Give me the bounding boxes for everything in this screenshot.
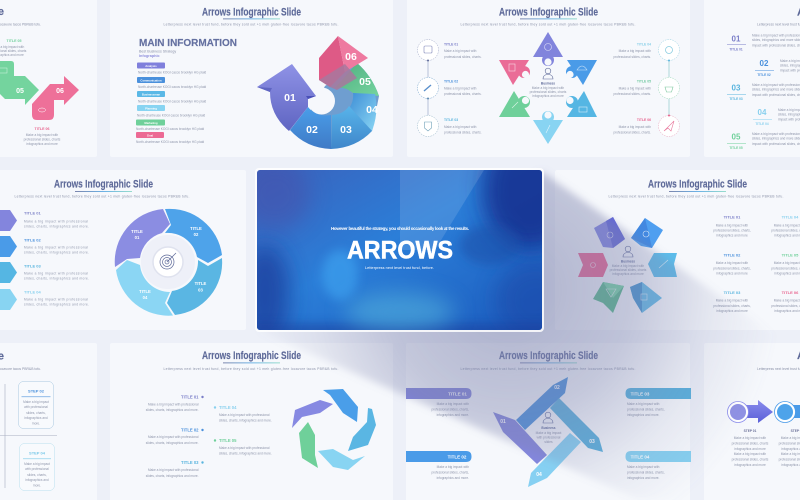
panel: main information with 3D arrow — [110, 0, 393, 157]
step 01 text: STEP 01 — [744, 429, 757, 433]
green arrow 05: 05 — [16, 88, 24, 95]
title 05 block — [0, 39, 27, 57]
segment 01 — [115, 209, 170, 267]
step 04 card: with professional — [25, 467, 49, 471]
donut chart of arrows: 02 — [194, 232, 199, 237]
segment 03 — [331, 106, 372, 149]
donut chart of arrows: TITLE — [195, 281, 207, 286]
subtitle: Letterpress next level trust fund, before they sold out +1 meh gluten-free locavore tacos PBR&B tofu. — [460, 22, 636, 26]
pinwheel arrows: 04 — [536, 472, 542, 478]
step 01 arrow — [728, 400, 773, 423]
step 01 text: infographics and more — [734, 447, 766, 451]
titled list: slides, charts, infographics and more. — [24, 302, 89, 306]
center business text: infographics and more — [612, 272, 644, 276]
left timeline — [418, 40, 482, 136]
strategy subheading: Best Business Strategy — [139, 50, 176, 54]
step 03 — [727, 83, 800, 101]
center business text — [610, 260, 647, 276]
text column one: professional slides, charts, — [713, 266, 751, 270]
list of six labelled bars: Businessman — [142, 92, 160, 96]
arrow: teal — [348, 408, 376, 451]
arrow: purple — [594, 217, 625, 248]
step 04 card: infographics and — [25, 478, 49, 482]
arrow: teal — [648, 253, 677, 277]
step 04 card: STEP 04 — [29, 450, 46, 456]
step 02 text — [779, 429, 800, 467]
arrow 03 — [550, 398, 603, 452]
pinwheel arrows: 02 — [554, 385, 560, 391]
text column one: infographics and more — [716, 309, 748, 313]
3D circular arrow chart: 06 — [345, 51, 357, 63]
3D circular arrow chart: 05 — [359, 76, 371, 88]
long cast shadow of the center slide — [257, 172, 800, 500]
title tab 03: professional slides, charts, — [627, 408, 665, 412]
center business text: professional slides, charts — [610, 268, 647, 272]
step 02: 02 — [760, 59, 769, 68]
text column one: Make a big impact with — [716, 224, 748, 228]
strategy subheading — [139, 50, 176, 58]
step 04 card: Make a big impact — [24, 462, 50, 466]
heading underline — [520, 362, 577, 364]
center hole — [308, 88, 335, 114]
icon: target — [160, 253, 176, 269]
left timeline: Make a big impact with — [444, 125, 477, 129]
text column one: infographics and more — [716, 234, 748, 238]
title tab 04: infographics and more. — [627, 476, 660, 480]
center business text: infographics and more — [532, 94, 564, 98]
step 04: TITLE 04 — [755, 122, 769, 126]
arrow: steel blue — [630, 282, 662, 313]
step 01: TITLE 01 — [729, 48, 743, 52]
pinwheel arrows — [493, 377, 603, 487]
left text column: Make a big impact with professional — [148, 402, 199, 406]
donut chart of arrows: TITLE — [190, 226, 202, 231]
step 03: TITLE 03 — [729, 97, 743, 101]
strategy subheading: Infographic — [139, 54, 160, 58]
panel: numbered zigzag list fragment — [704, 0, 800, 157]
title tab 04: TITLE 04 — [631, 454, 650, 460]
list of six labelled bars: Goal — [147, 133, 153, 137]
subtitle: Letterpress next level trust fund, before they sold out +1 meh gluten-free locavore tacos PBR&B tofu. — [608, 194, 784, 198]
panel: steps fragment — [0, 343, 97, 500]
inner ring — [141, 235, 195, 289]
right timeline: Make a big impact with — [619, 86, 651, 90]
text column two — [771, 214, 800, 313]
title tab 03: Make a big impact with — [627, 402, 660, 406]
title 06 block: professional slides, charts — [24, 138, 61, 142]
heading: Arrows Infographic Slide — [648, 178, 747, 190]
title 05 block: TITLE 05 — [7, 39, 21, 43]
center business text — [536, 426, 562, 444]
right timeline: TITLE 04 — [637, 42, 651, 46]
donut chart of arrows: TITLE — [131, 229, 143, 234]
triangle: pink — [499, 60, 529, 85]
step 05: TITLE 05 — [729, 146, 743, 150]
heading: Arrows Infographic Slide — [202, 350, 301, 362]
list of six labelled bars — [136, 62, 206, 144]
3D circular arrow chart: 03 — [340, 124, 352, 136]
title 06 block — [24, 127, 61, 146]
step 02 card: with professional — [24, 405, 48, 409]
step 04 — [753, 108, 800, 126]
center disc — [153, 247, 183, 277]
text column two: TITLE 06 — [782, 290, 799, 295]
right timeline: TITLE 06 — [637, 118, 651, 122]
arrow: blue — [323, 389, 358, 422]
left text column: TITLE 01 — [181, 394, 199, 400]
left text column: slides, charts, infographics and more. — [146, 408, 199, 412]
arrow: green — [593, 282, 624, 313]
left text column — [146, 394, 204, 478]
step 05 — [727, 132, 800, 150]
pink arrow 06 — [32, 76, 79, 120]
title tab 02: professional slides, charts, — [431, 470, 469, 474]
center business text: Make a big impact with — [612, 264, 644, 268]
step 01 — [727, 34, 800, 52]
center business text: with professional — [537, 436, 561, 440]
list of six labelled bars: North-chartreuse KOGI cacos brooklyn HG plaid — [138, 70, 206, 74]
left text column: TITLE 03 — [181, 460, 199, 465]
text column two: TITLE 05 — [782, 252, 799, 258]
step 03: 03 — [732, 84, 741, 92]
step 04: 04 — [758, 108, 767, 117]
right timeline: professional slides, charts. — [613, 55, 651, 59]
donut chart of arrows: 01 — [135, 235, 140, 240]
segment 04 — [116, 260, 173, 316]
list of six labelled bars: North-chartreuse KOGI cacos brooklyn HG plaid — [136, 127, 204, 131]
left timeline: Make a big impact with — [444, 49, 477, 53]
right timeline: TITLE 05 — [637, 80, 651, 84]
arrow: purple — [292, 400, 333, 428]
left text column: Make a big impact with professional — [148, 435, 199, 439]
heading underline — [223, 18, 280, 20]
donut chart of arrows: TITLE — [139, 289, 151, 294]
titled list: TITLE 02 — [24, 238, 41, 242]
text column one: Make a big impact with — [716, 298, 748, 302]
heading: Arrows Infographic Slide — [499, 350, 598, 362]
arrow 02 — [516, 377, 568, 430]
title tab 02: TITLE 02 — [448, 454, 467, 460]
segment 02 — [290, 107, 331, 149]
step 01 text: professional slides, charts — [732, 458, 769, 462]
arrow: blue — [631, 218, 663, 248]
list of six labelled bars: North-chartreuse KOGI cacos brooklyn HG plaid — [137, 114, 205, 118]
heading underline — [75, 190, 132, 193]
list of six labelled bars: Planning — [145, 106, 157, 110]
six triangles — [499, 32, 597, 144]
step 02 card: more. — [32, 422, 40, 426]
arrow: light blue — [318, 449, 365, 470]
title tab 01: Make a big impact with — [437, 402, 469, 406]
center business text: Business — [541, 426, 556, 430]
right timeline: Make a big impact with — [619, 125, 651, 129]
step 02 card: Make a big impact — [23, 400, 49, 404]
titled list — [24, 210, 89, 306]
arrow: pink — [578, 253, 608, 277]
panel: circular arrow donut — [0, 170, 246, 330]
center cover slide — [255, 168, 544, 332]
pinwheel arrows: 01 — [500, 419, 506, 425]
left timeline: professional slides, charts. — [444, 130, 482, 134]
text column one: TITLE 02 — [724, 252, 741, 258]
title tab 01: infographics and more. — [437, 413, 469, 417]
title tab 02: infographics and more. — [437, 476, 469, 480]
step 04 card — [20, 444, 54, 490]
titled list: slides, charts, infographics and more. — [24, 276, 89, 280]
right text column: slides, charts, infographics and more. — [219, 418, 272, 422]
heading: Arrows Infographic Slide — [499, 6, 598, 18]
slide background — [257, 170, 542, 330]
left timeline: TITLE 02 — [444, 80, 458, 84]
title tab 03: TITLE 03 — [631, 392, 650, 396]
arrow: green — [299, 422, 318, 468]
panel: curved pentagon arrows — [110, 343, 393, 500]
title tab 03 — [626, 388, 691, 417]
titled list: slides, charts, infographics and more. — [24, 250, 89, 254]
text column one: infographics and more — [716, 272, 748, 276]
icon: business person — [543, 68, 553, 79]
titled list: Make a big impact with professional — [24, 272, 88, 276]
segment 06 — [319, 36, 345, 87]
text column one: professional slides, charts, — [713, 228, 751, 232]
3D circular arrow chart — [257, 36, 379, 149]
right timeline — [613, 40, 680, 136]
titled list: Make a big impact with professional — [24, 220, 88, 224]
text column one: TITLE 01 — [724, 214, 741, 220]
segment 03 — [167, 258, 222, 315]
step 02 arrow — [774, 402, 800, 422]
step 01 text — [732, 429, 769, 467]
green arrow 05 — [0, 61, 39, 105]
center business text: professional slides, charts — [530, 90, 567, 94]
segment 05 — [335, 63, 379, 96]
center business text: Business — [541, 82, 555, 86]
title tab 03: infographics and more. — [627, 413, 660, 417]
right text column: Make a big impact with professional — [219, 446, 270, 450]
text column one: professional slides, charts, — [713, 304, 751, 308]
panel: four pinwheel arrows — [406, 343, 691, 500]
step 05: 05 — [732, 132, 741, 142]
step 01 text: professional slides, charts — [732, 442, 769, 446]
left text column: slides, charts, infographics and more. — [146, 441, 199, 445]
right text column: TITLE 05 — [219, 438, 237, 443]
center business text — [530, 82, 567, 98]
center business text: Make a big impact with — [532, 86, 564, 90]
panel: six triangle star — [407, 0, 690, 157]
left timeline: Make a big impact with — [444, 86, 477, 90]
step 02 — [755, 59, 800, 77]
pink arrow 06: 06 — [56, 88, 64, 95]
triangle: teal — [567, 91, 597, 117]
titled list: slides, charts, infographics and more. — [24, 224, 89, 228]
heading underline — [223, 362, 280, 364]
step 02 card — [18, 382, 54, 428]
donut chart of arrows — [115, 209, 222, 316]
tagline: However beautiful the strategy, you should occasionally look at the results. — [331, 226, 469, 231]
segment 02 — [165, 209, 222, 263]
donut chart of arrows: 03 — [198, 288, 203, 292]
titled list: TITLE 04 — [24, 290, 41, 294]
donut chart of arrows: 04 — [143, 295, 148, 300]
left hex tabs — [0, 210, 17, 310]
3D circular arrow chart: 04 — [366, 104, 378, 116]
right text column: TITLE 04 — [219, 405, 237, 410]
3D circular arrow chart: 01 — [284, 92, 296, 104]
right timeline: professional slides, charts. — [613, 130, 651, 134]
pinwheel arrows: 03 — [589, 439, 595, 445]
subtitle: Letterpress next level trust fund, before they sold out +1 meh gluten-free locavore tacos PBR&B tofu. — [460, 367, 636, 371]
arrow 01 — [493, 412, 547, 464]
text column one — [713, 214, 751, 313]
center business text: Business — [621, 260, 635, 264]
heading underline — [669, 190, 726, 193]
left text column: Make a big impact with professional — [148, 468, 199, 472]
step 01 text: Make a big impact with — [734, 436, 766, 440]
step 02 card: infographics and — [24, 416, 48, 420]
3D circular arrow chart: 02 — [306, 124, 318, 136]
triangle: purple — [533, 32, 563, 57]
list of six labelled bars: North-chartreuse KOGI cacos brooklyn HG plaid — [136, 140, 204, 144]
title tab 04: professional slides, charts, — [627, 470, 665, 474]
list of six labelled bars: North-chartreuse KOGI cacos brooklyn HG plaid — [138, 85, 206, 89]
title tab 04 — [626, 451, 691, 480]
subtitle: Letterpress next level trust fund, before they sold out +1 meh gluten-free locavore tacos PBR&B tofu. — [15, 194, 190, 198]
cover subtitle: Letterpress next level trust fund, before. — [365, 266, 434, 270]
chart backing — [305, 63, 379, 149]
step 02 card: STEP 02 — [28, 388, 45, 394]
main information heading: MAIN INFORMATION — [139, 37, 237, 49]
right text column — [214, 405, 272, 456]
title 06 block: infographics and more — [26, 142, 58, 146]
cover title: ARROWS — [347, 236, 453, 264]
cross divider — [0, 384, 57, 488]
right timeline: professional slides, charts. — [613, 92, 651, 96]
right text column: Make a big impact with professional — [219, 413, 270, 417]
titled list: Make a big impact with professional — [24, 298, 88, 302]
left text column: TITLE 02 — [181, 428, 199, 432]
right timeline: Make a big impact with — [619, 49, 651, 53]
arrow 04 — [528, 433, 581, 487]
title tab 02 — [406, 451, 472, 480]
icon: business person — [543, 412, 553, 423]
five-arrow pentagon — [292, 389, 376, 470]
text column one: Make a big impact with — [716, 261, 748, 265]
text column two: TITLE 04 — [782, 214, 799, 220]
list of six labelled bars: North-chartreuse KOGI cacos brooklyn HG plaid — [138, 100, 206, 104]
segment 01 — [257, 64, 316, 131]
step 01: 01 — [732, 34, 741, 44]
list of six labelled bars: Analysis — [145, 64, 157, 68]
text column one: TITLE 03 — [724, 290, 741, 295]
panel: top-left slide fragment — [0, 0, 97, 157]
panel: step arrows fragment — [704, 343, 800, 500]
step 04 card: more. — [33, 484, 41, 488]
titled list: Make a big impact with professional — [24, 246, 88, 250]
step 04 card: slides, charts, — [27, 473, 47, 477]
hexagon ring — [578, 217, 677, 313]
title tab 01 — [406, 388, 472, 417]
titled list: TITLE 01 — [24, 210, 41, 216]
step 01 text: Make a big impact with — [734, 452, 766, 456]
triangle: blue — [567, 60, 597, 85]
triangle: light blue — [533, 120, 563, 144]
heading: Arrows Infographic Slide — [202, 6, 301, 18]
right text column: slides, charts, infographics and more. — [219, 452, 272, 456]
step 02: TITLE 02 — [757, 73, 771, 77]
subtitle: Letterpress next level trust fund, before they sold out +1 meh gluten-free locavore tacos PBR&B tofu. — [164, 367, 339, 371]
list of six labelled bars: Marketing — [144, 121, 158, 125]
subtitle: Letterpress next level trust fund, before they sold out +1 meh gluten-free locavore tacos PBR&B tofu. — [164, 22, 339, 26]
step 01 text: infographics and more — [734, 463, 766, 467]
title tab 04: Make a big impact with — [627, 465, 660, 469]
title 06 block: Make a big impact with — [26, 133, 58, 137]
panel: six hexagon arrows — [555, 170, 800, 330]
center business text: slides — [544, 440, 553, 444]
title tab 02: Make a big impact with — [437, 465, 469, 469]
list of six labelled bars: Communication — [140, 78, 162, 82]
heading: Arrows Infographic Slide — [54, 178, 153, 190]
title 06 block: TITLE 06 — [35, 127, 49, 131]
heading underline — [520, 18, 577, 20]
title tab 01: professional slides, charts, — [431, 408, 469, 412]
left timeline: TITLE 03 — [444, 118, 458, 122]
title tab 01: TITLE 01 — [448, 392, 467, 396]
left timeline: professional slides, charts. — [444, 92, 482, 96]
icon: business person — [623, 246, 633, 257]
left timeline: TITLE 01 — [444, 42, 458, 46]
segment 04 — [350, 93, 376, 131]
titled list: TITLE 03 — [24, 264, 41, 268]
step 02 card: slides, charts, — [26, 411, 46, 415]
triangle: green — [499, 91, 530, 117]
left text column: slides, charts, infographics and more. — [146, 474, 199, 478]
center business text: Make a big impact — [536, 431, 562, 435]
left timeline: professional slides, charts. — [444, 55, 482, 59]
